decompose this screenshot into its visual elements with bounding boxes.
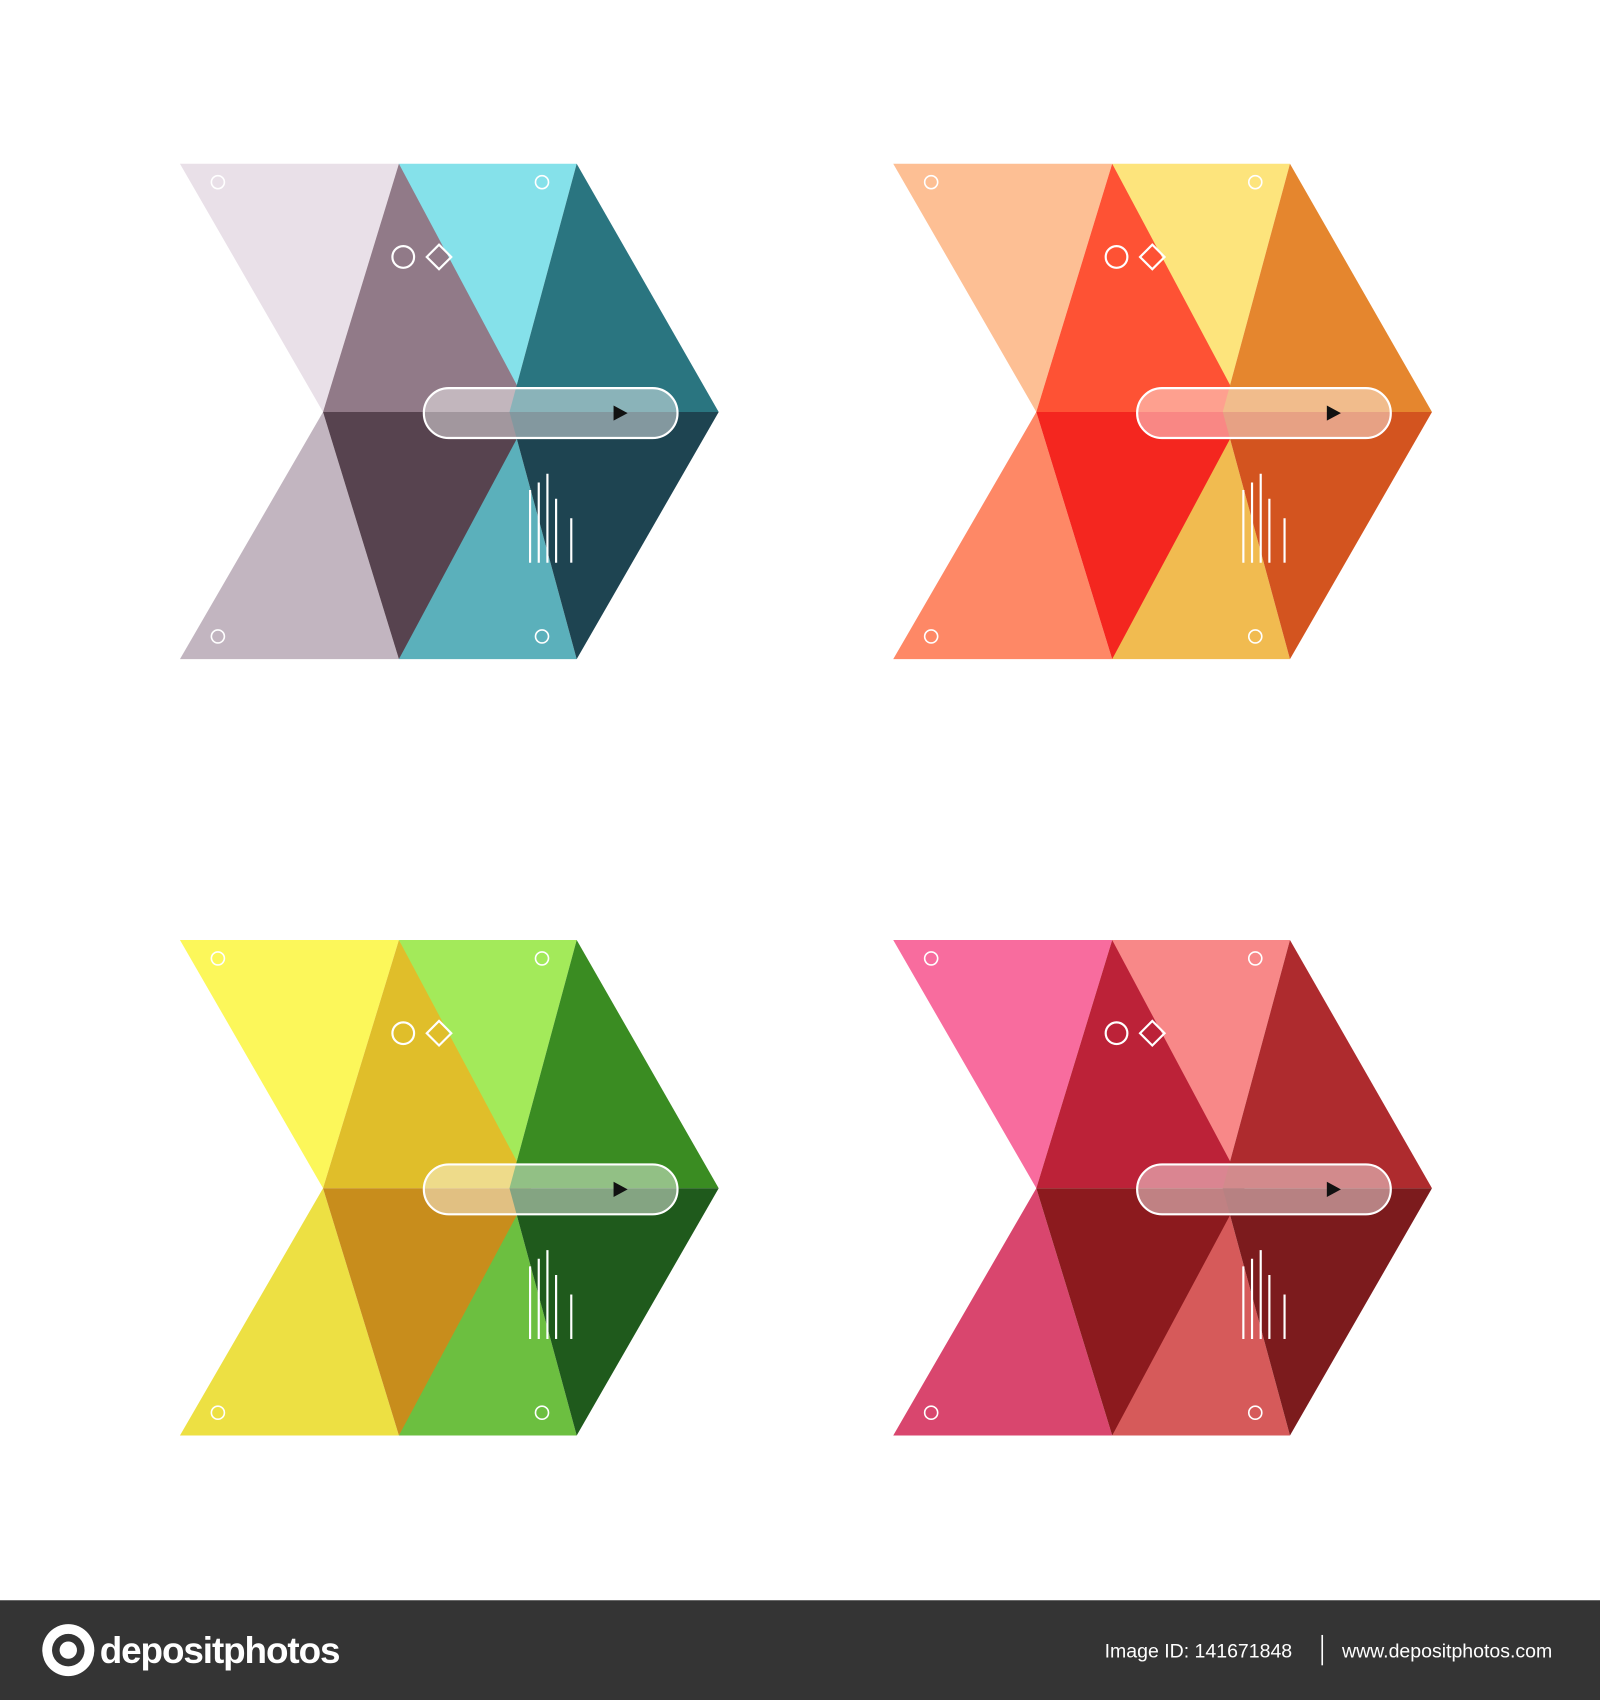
- panel: arrow yellow-green: [180, 940, 719, 1435]
- logo text: depositphotos: [100, 1630, 339, 1671]
- icon: logo: [42, 1624, 94, 1676]
- panel: arrow orange: [893, 164, 1432, 659]
- panel: arrow pink-red: [893, 940, 1432, 1435]
- website: www.depositphotos.com: [1341, 1641, 1552, 1663]
- footer bar: [0, 1600, 1600, 1700]
- image id: Image ID: 141671848: [1105, 1641, 1292, 1663]
- panel: arrow grey-teal: [180, 164, 719, 659]
